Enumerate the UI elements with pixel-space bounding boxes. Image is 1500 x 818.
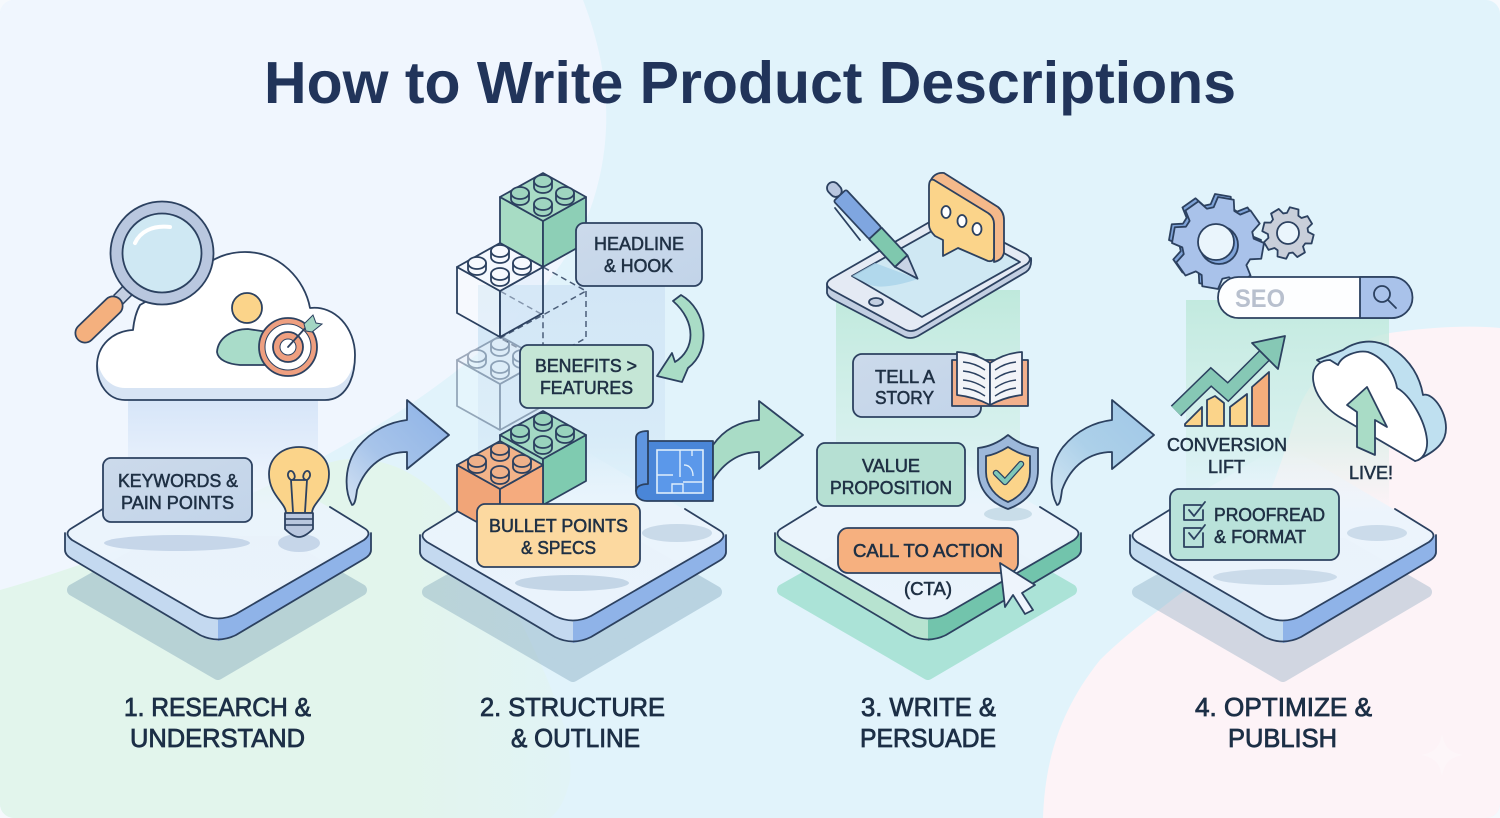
button: call to action <box>838 528 1018 573</box>
label: CTA: (CTA) <box>904 579 952 599</box>
title: How to Write Product Descriptions <box>264 50 1236 116</box>
shadows under step 4 items <box>1213 525 1407 585</box>
icon: tablet <box>827 214 1031 338</box>
arrow: step 3 to step 4 <box>1052 400 1154 505</box>
chart: conversion lift: LIFT <box>1208 457 1245 477</box>
label shadow <box>104 535 250 551</box>
label: proofread and format: PROOFREAD <box>1214 505 1325 525</box>
icon: white outline brick <box>457 243 543 337</box>
chart: conversion lift: CONVERSION <box>1167 435 1287 455</box>
icon: cursor <box>1000 563 1035 614</box>
button: call to action: CALL TO ACTION <box>853 541 1003 561</box>
panel: step 1 research and understand <box>65 202 371 674</box>
icon: cloud with audience and target <box>97 252 357 400</box>
step heading 4 <box>1195 692 1372 753</box>
icon: speech bubble <box>929 173 1004 262</box>
step heading 4: 4. OPTIMIZE & <box>1195 692 1372 722</box>
icon: gears <box>1163 188 1319 295</box>
search bar: SEO: SEO <box>1235 285 1285 313</box>
arrow: step 1 to step 2 <box>347 400 449 505</box>
search bar: SEO <box>1218 277 1412 318</box>
icon: cloud upload <box>1313 342 1446 483</box>
icon: orange brick <box>457 441 543 535</box>
platform 1 <box>65 446 371 674</box>
step 4 backdrop pillar <box>1186 300 1389 510</box>
icon: magnifying glass <box>85 202 214 333</box>
step heading 3: PERSUADE <box>860 723 996 753</box>
icon: faded outline brick <box>457 336 543 430</box>
step 2 backdrop pillar <box>478 285 665 500</box>
label: value proposition: PROPOSITION <box>830 478 952 498</box>
label: tell a story <box>853 354 981 417</box>
step heading 1: 1. RESEARCH & <box>124 692 311 722</box>
arrow: step 2 to step 3 <box>713 401 803 480</box>
step heading 3: 3. WRITE & <box>861 692 996 722</box>
icon: green lower brick <box>500 411 586 505</box>
label: keywords and pain points: KEYWORDS & <box>118 471 238 491</box>
label: benefits over features: BENEFITS > <box>535 356 637 376</box>
icon: green top brick <box>500 173 586 267</box>
panel: step 4 optimize and publish <box>1130 188 1446 676</box>
step heading 2: & OUTLINE <box>511 723 640 753</box>
label: tell a story: STORY <box>875 388 934 408</box>
label: bullet points and specs: & SPECS <box>521 538 596 558</box>
icon: light bulb <box>269 447 329 552</box>
icon: shield with check <box>978 435 1038 521</box>
step heading 2 <box>480 692 665 753</box>
step heading 4: PUBLISH <box>1228 723 1337 753</box>
label: bullet points and specs: BULLET POINTS <box>489 516 628 536</box>
label: benefits over features: FEATURES <box>540 378 633 398</box>
platform 2 <box>420 448 726 676</box>
icon: dashed outline brick <box>500 267 586 362</box>
panel: step 2 structure and outline <box>420 173 726 676</box>
step heading 1: UNDERSTAND <box>130 723 305 753</box>
label: value proposition: VALUE <box>862 456 920 476</box>
arrow: headline to benefits <box>657 295 704 382</box>
label: proofread and format <box>1170 489 1339 560</box>
panel: step 3 write and persuade <box>775 173 1081 674</box>
platform 4 <box>1130 448 1436 676</box>
label: headline and hook: & HOOK <box>604 256 673 276</box>
label: benefits over features <box>520 345 653 408</box>
step heading 2: 2. STRUCTURE <box>480 692 665 722</box>
step heading 3 <box>860 692 996 753</box>
sparkle watermark <box>1421 734 1463 776</box>
label: keywords and pain points <box>103 458 252 522</box>
label: bullet points and specs <box>477 504 640 567</box>
step 1 backdrop pillar <box>128 398 318 488</box>
icon: open book <box>952 352 1028 406</box>
label: headline and hook <box>576 223 702 286</box>
chart: conversion lift <box>1167 336 1287 477</box>
label: keywords and pain points: PAIN POINTS <box>121 493 234 513</box>
label: tell a story: TELL A <box>875 367 935 387</box>
step 3 backdrop pillar <box>836 290 1020 500</box>
label: value proposition <box>817 443 965 506</box>
icon: blueprint <box>636 431 713 542</box>
step heading 1 <box>124 692 311 753</box>
icon: cloud upload: LIVE! <box>1349 463 1393 483</box>
label: headline and hook: HEADLINE <box>594 234 684 254</box>
icon: pen <box>823 178 924 284</box>
label: proofread and format: & FORMAT <box>1214 527 1306 547</box>
label shadow <box>515 575 629 591</box>
platform 3 <box>775 446 1081 674</box>
